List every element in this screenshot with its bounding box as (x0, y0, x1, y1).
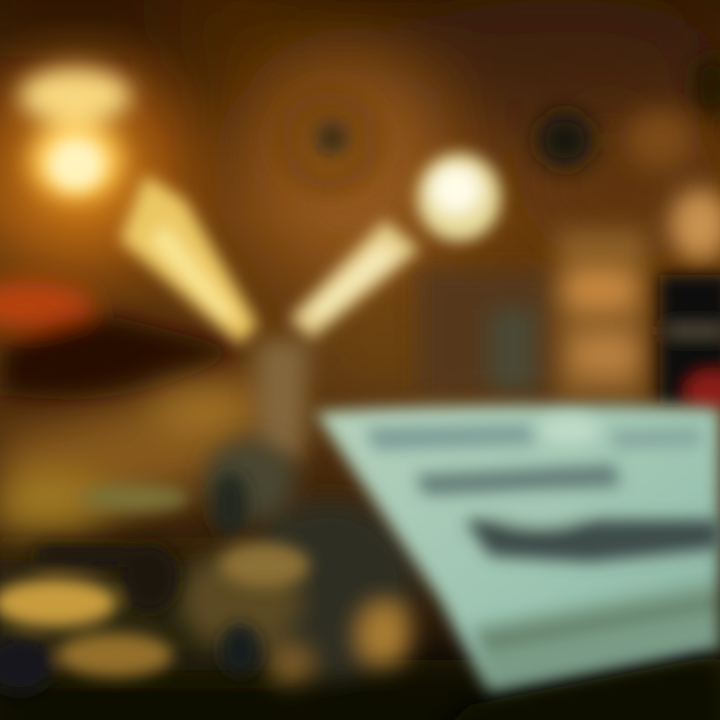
light beam: right (290, 220, 420, 340)
light beam: left (120, 175, 258, 345)
hourglass stem at centre (255, 340, 308, 460)
wall tones (0, 0, 720, 390)
icon: white bulb (417, 153, 501, 241)
icon: lamp lights (19, 68, 131, 198)
table reflection (0, 375, 290, 540)
pile of coins (0, 440, 415, 693)
bottom dark floor (0, 560, 720, 720)
panel: papers (315, 405, 720, 695)
lamp glow (0, 15, 235, 325)
bottom shadow under papers (430, 655, 720, 720)
dark ring on wall (286, 96, 374, 184)
shelf of books on the right (420, 53, 720, 412)
text smudges on papers (365, 416, 720, 562)
red horizon and dark mound on the left (0, 281, 240, 400)
